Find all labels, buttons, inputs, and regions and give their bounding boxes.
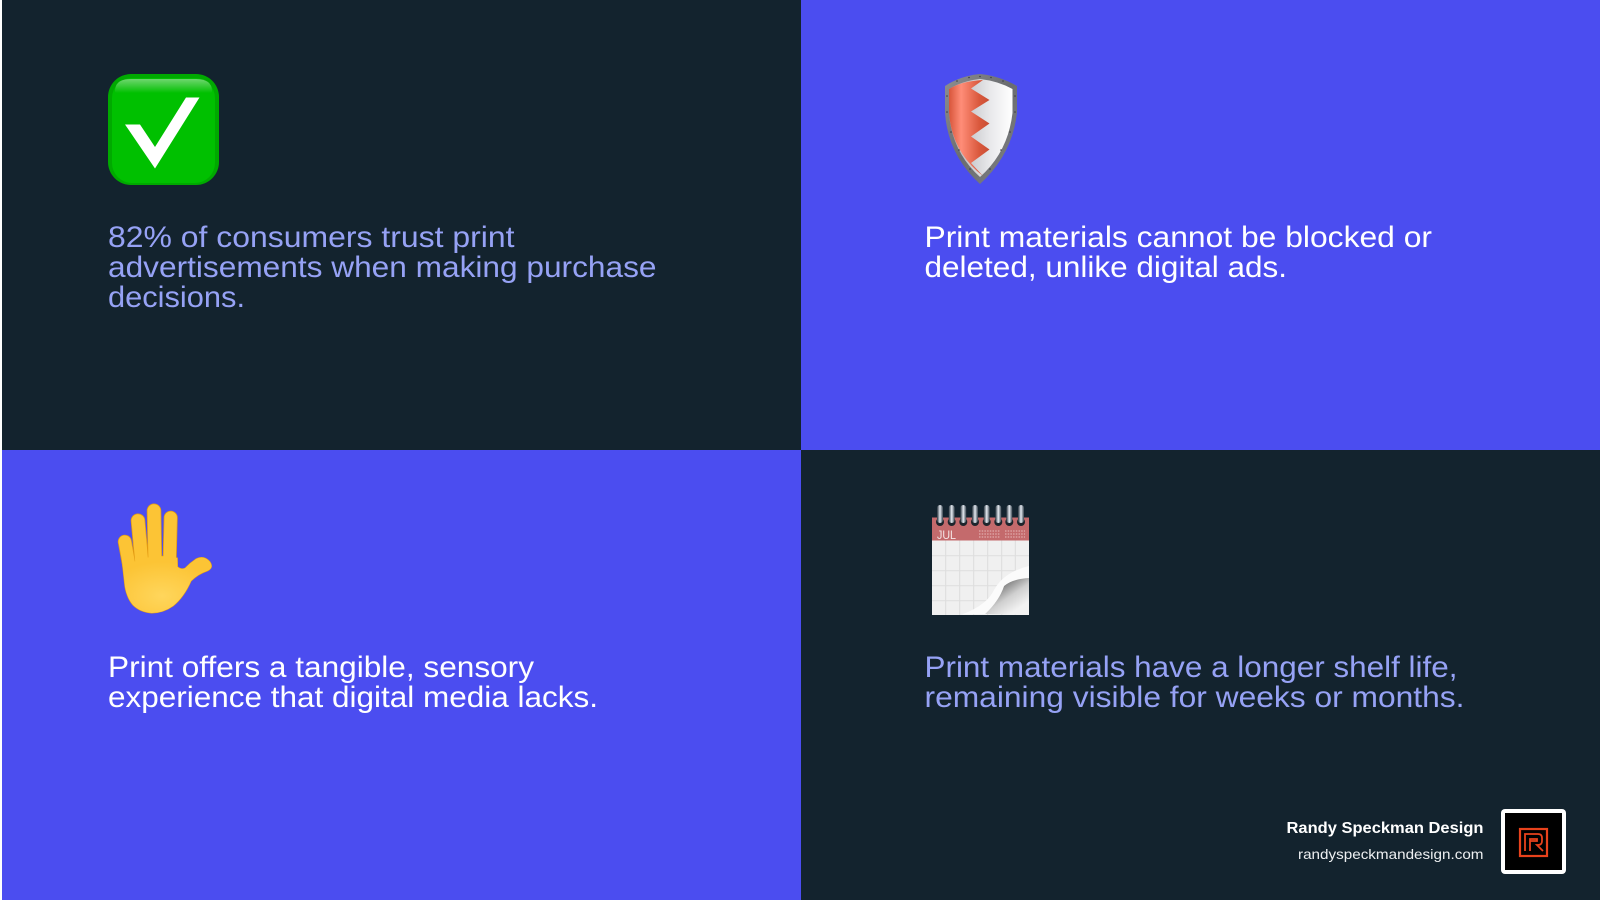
text: brand name and website: Randy Speckman Design xyxy=(1286,820,1484,837)
text: consumer trust statistic: decisions. xyxy=(108,281,245,314)
text: print cannot be blocked: Print materials cannot be blocked or xyxy=(924,221,1432,254)
icon: green check mark xyxy=(108,74,219,185)
panel: consumer trust xyxy=(2,0,801,450)
panel: tangible experience xyxy=(2,450,801,900)
text: tangible sensory experience: experience that digital media lacks. xyxy=(108,681,598,714)
text: longer shelf life: remaining visible for weeks or months. xyxy=(924,681,1464,714)
icon: shield xyxy=(945,74,1017,184)
icon: calendar: JUL xyxy=(937,530,957,542)
text: longer shelf life: Print materials have a longer shelf life, xyxy=(924,651,1458,684)
text: consumer trust statistic: 82% of consumers trust print xyxy=(108,221,515,254)
panel: longer shelf life xyxy=(801,450,1600,900)
icon: raised hand xyxy=(122,511,211,613)
text: consumer trust statistic: advertisements when making purchase xyxy=(108,251,656,284)
text: brand name and website xyxy=(1286,820,1484,862)
icon: brand logo xyxy=(1501,809,1566,874)
panel: cannot be blocked xyxy=(801,0,1600,450)
text: print cannot be blocked: deleted, unlike digital ads. xyxy=(924,251,1287,284)
text: brand name and website: randyspeckmandesign.com xyxy=(1298,846,1484,862)
icon: calendar xyxy=(932,505,1029,615)
text: tangible sensory experience: Print offers a tangible, sensory xyxy=(108,651,534,684)
